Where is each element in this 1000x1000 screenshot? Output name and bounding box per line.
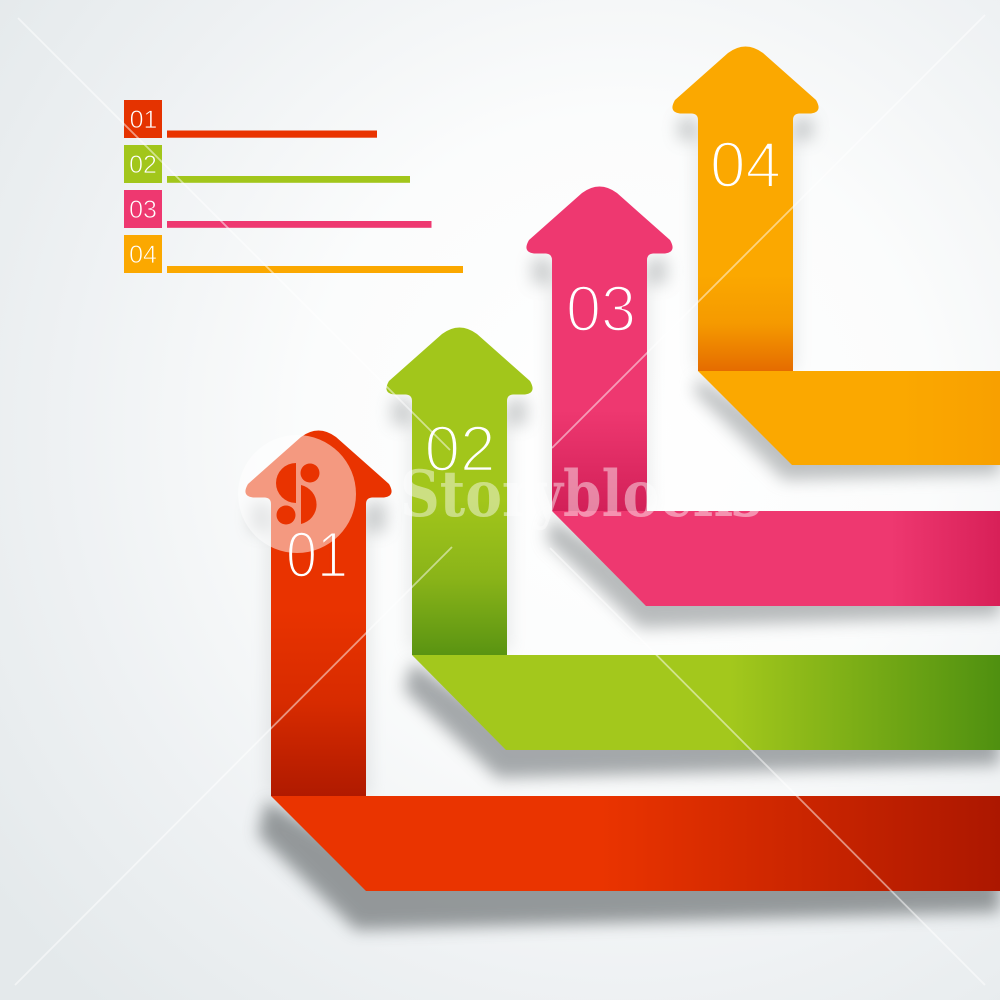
arrow shaft and head 04 xyxy=(672,46,819,371)
label 01: 01 xyxy=(286,518,348,591)
legend item 03: 03 xyxy=(129,196,157,224)
label 02: 02 xyxy=(424,412,496,485)
watermark text: Storyblocks xyxy=(400,457,762,532)
label 04: 04 xyxy=(710,128,781,201)
arrow 03 (pink) xyxy=(526,186,1000,606)
wing shadows xyxy=(251,118,813,532)
arrow shaft and head 02 xyxy=(386,328,533,655)
arrow shaft and head 03 xyxy=(526,186,673,511)
legend item 03 xyxy=(124,190,432,228)
shaft soft shadows xyxy=(266,130,797,795)
band 01 xyxy=(271,796,1000,891)
band 03 xyxy=(552,511,1000,606)
arrow shaft and head 01 xyxy=(245,430,392,796)
arrow 01 (red) xyxy=(245,430,1000,891)
arrow 04 (orange) xyxy=(672,46,1000,465)
label 03: 03 xyxy=(566,272,636,345)
watermark logo xyxy=(238,435,356,553)
band 04 xyxy=(698,371,1000,465)
legend item 01: 01 xyxy=(130,106,157,134)
legend item 02 xyxy=(124,145,410,183)
band 02 xyxy=(412,655,1000,750)
legend item 04: 04 xyxy=(129,241,157,269)
legend item 01 xyxy=(124,100,377,138)
legend xyxy=(124,100,463,273)
legend item 04 xyxy=(124,235,463,273)
legend item 02: 02 xyxy=(129,151,157,179)
drop shadows xyxy=(251,118,1000,930)
arrow 02 (green) xyxy=(386,328,1000,750)
